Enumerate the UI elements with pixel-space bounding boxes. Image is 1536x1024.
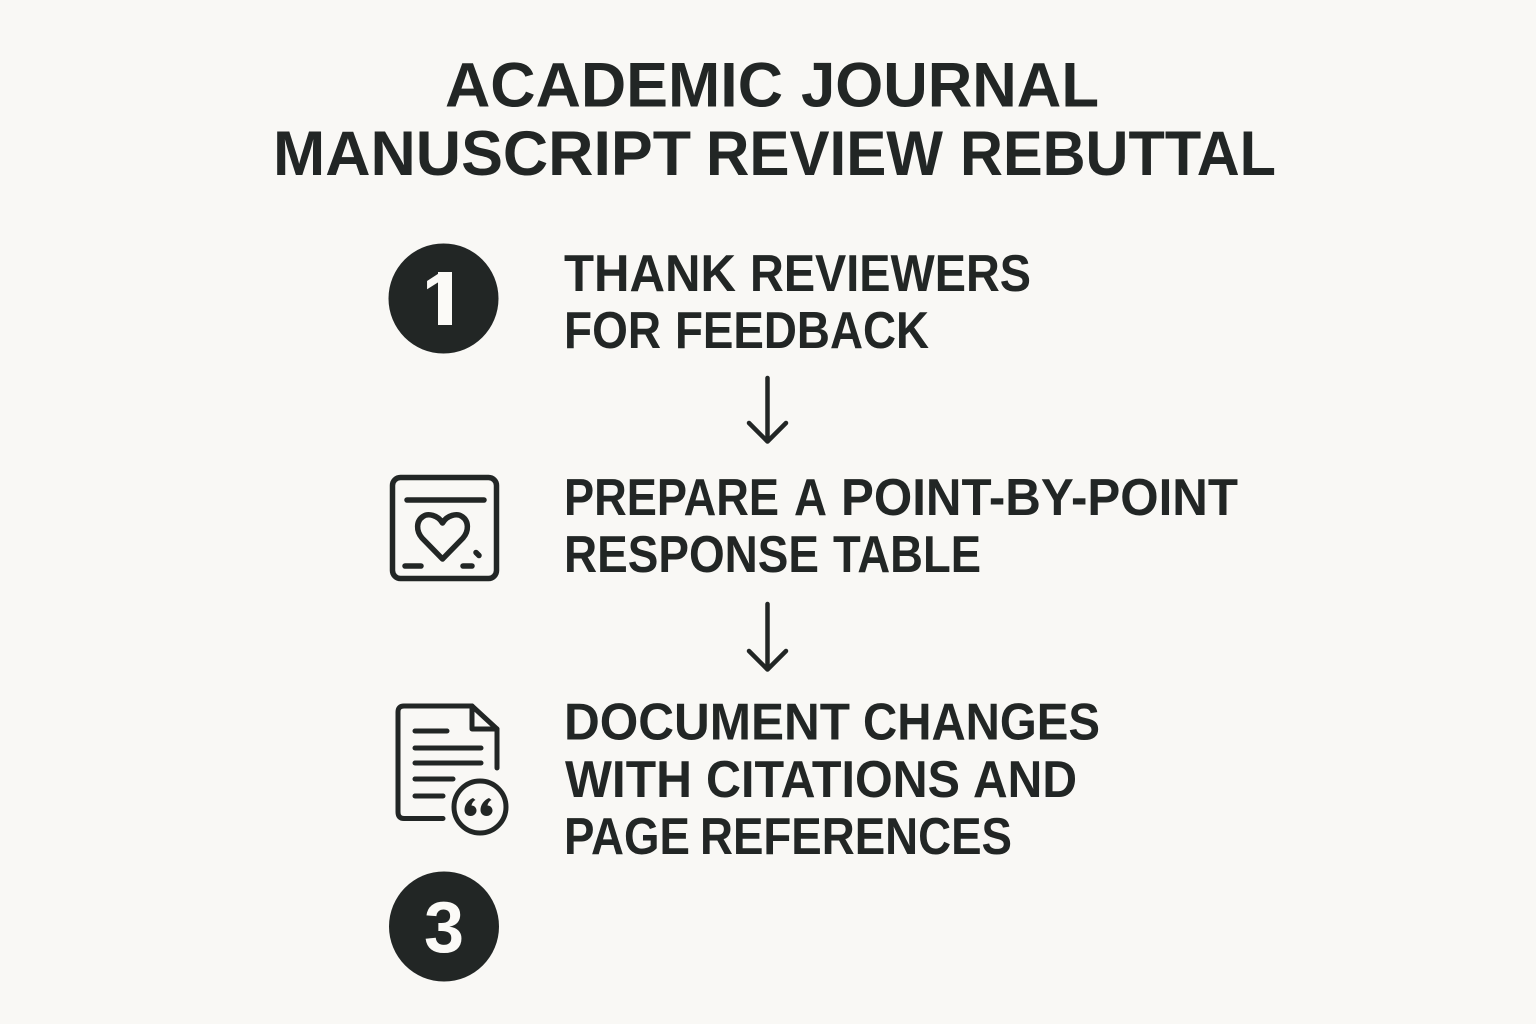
title: ACADEMIC [445,50,783,120]
step 2 text: A [794,469,827,527]
step 3 number badge: 3 [424,888,464,968]
step 3 text: WITH [565,751,692,809]
step 2 text: PREPARE [564,469,779,527]
icon: card with heart [392,478,496,578]
step 3 text: REFERENCES [700,808,1012,866]
title [273,50,1276,189]
step 3 number badge [389,872,499,982]
step 3 text: PAGE [564,808,690,866]
step 2 text [564,469,1238,584]
step 2 text: TABLE [833,526,981,584]
step 3 text [564,694,1100,866]
step 3 text: DOCUMENT [564,694,850,752]
arrow: step 2 to step 3 [749,604,786,670]
step 1 text: THANK [564,245,736,303]
step 1 number badge: 1 [422,257,464,342]
step 2 text: RESPONSE [564,526,819,584]
arrow: step 1 to step 2 [749,378,786,442]
icon: document with quotation badge [398,706,506,833]
step 1 number badge [388,244,498,354]
step 3 text: CHANGES [863,694,1100,752]
step 1 text: FEEDBACK [675,302,929,360]
title: REVIEW [706,119,944,189]
step 1 text: FOR [564,302,661,360]
step 3 text: AND [973,751,1077,809]
step 1 text: REVIEWERS [750,245,1031,303]
title: MANUSCRIPT [273,119,691,189]
step 1 text [564,245,1031,360]
step 2 text: POINT-BY-POINT [841,469,1238,527]
title: REBUTTAL [960,119,1276,189]
step 3 text: CITATIONS [706,751,960,809]
title: JOURNAL [801,50,1099,120]
